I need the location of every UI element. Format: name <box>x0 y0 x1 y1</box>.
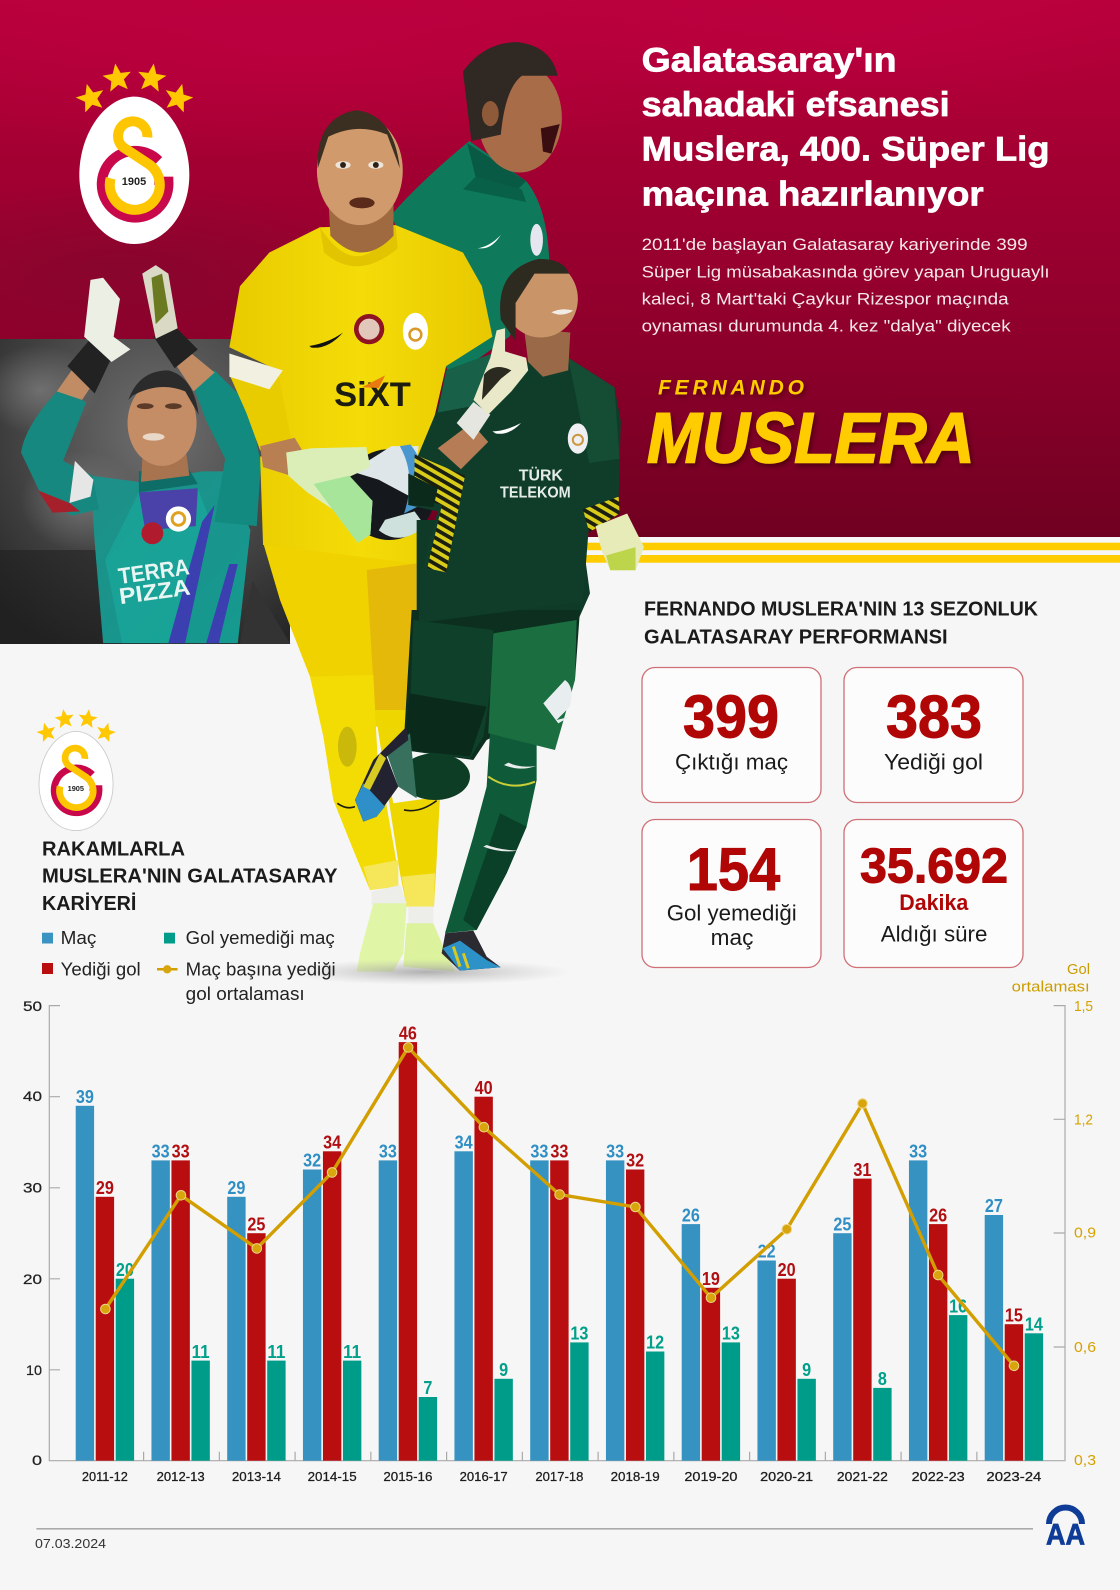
legend: Gol yemediği maç <box>186 927 335 948</box>
season 2012-13: 11 <box>192 1342 210 1362</box>
ball <box>344 449 435 540</box>
right axis labels: 1,5 <box>1074 998 1093 1015</box>
stat card: goals conceded: Yediği gol <box>884 749 983 774</box>
season 2023-24 <box>985 1196 1043 1484</box>
forearm and glove <box>438 423 488 469</box>
legend: Maç <box>61 927 96 948</box>
icon: agency logo <box>1046 1508 1085 1552</box>
icon: agency logo: AA <box>1046 1519 1085 1552</box>
crest and sponsor <box>166 506 191 532</box>
season 2021-22 <box>833 1160 892 1484</box>
stat card: clean sheets: maç <box>711 925 753 950</box>
right axis labels: 0,9 <box>1074 1224 1096 1242</box>
season 2023-24: 2023-24 <box>986 1469 1041 1484</box>
title: Galatasaray'ın <box>642 41 897 79</box>
season 2018-19: 32 <box>626 1151 644 1171</box>
left axis labels: 50 <box>23 998 42 1014</box>
season 2012-13 <box>151 1142 210 1484</box>
season 2022-23: 2022-23 <box>912 1469 965 1484</box>
arms <box>21 389 99 516</box>
stat card: goals conceded: 383 <box>886 683 982 750</box>
left axis labels: 30 <box>23 1180 42 1196</box>
title: maçına hazırlanıyor <box>642 175 984 213</box>
glove <box>286 447 372 543</box>
yellow jersey <box>229 110 492 564</box>
season 2015-16 <box>379 1023 437 1484</box>
club crest large: 1905 <box>122 176 146 188</box>
name: Fernando Muslera: FERNANDO <box>658 377 804 400</box>
name: Fernando Muslera: MUSLERA <box>647 400 975 478</box>
season 2019-20: 19 <box>702 1269 720 1289</box>
stat card: matches <box>642 668 821 802</box>
season 2019-20: 2019-20 <box>684 1469 737 1484</box>
crest, swoosh and sponsor <box>568 423 588 454</box>
title: Muslera, 400. Süper Lig <box>642 131 1050 169</box>
season 2016-17: 40 <box>475 1078 493 1098</box>
season 2012-13: 2012-13 <box>157 1469 205 1484</box>
season 2021-22: 25 <box>833 1214 851 1234</box>
player: goalkeeper in yellow <box>229 110 492 972</box>
intro paragraph: 2011'de başlayan Galatasaray kariyerinde 399 <box>642 235 1028 254</box>
season 2023-24: 14 <box>1025 1314 1043 1334</box>
season 2018-19: 12 <box>646 1333 664 1353</box>
season 2021-22: 31 <box>853 1160 871 1180</box>
season 2014-15: 34 <box>323 1132 341 1152</box>
season 2015-16: 2015-16 <box>383 1469 432 1484</box>
club crest large <box>73 61 196 244</box>
season 2017-18 <box>530 1142 589 1484</box>
season 2015-16: 46 <box>399 1023 417 1043</box>
season 2020-21 <box>757 1242 816 1484</box>
chart heading: RAKAMLARLA <box>42 838 185 861</box>
right axis labels <box>1074 998 1096 1469</box>
season 2020-21: 9 <box>802 1360 811 1380</box>
chart heading: MUSLERA'NIN GALATASARAY <box>42 865 338 888</box>
season 2011-12: 20 <box>116 1260 134 1280</box>
performance heading: FERNANDO MUSLERA'NIN 13 SEZONLUK <box>644 598 1038 621</box>
season 2016-17: 2016-17 <box>460 1469 508 1484</box>
season 2018-19: 33 <box>606 1142 624 1162</box>
season 2013-14: 25 <box>247 1214 265 1234</box>
shadow under players <box>282 959 572 985</box>
axes and ticks <box>49 1006 1065 1461</box>
season 2017-18: 13 <box>570 1324 588 1344</box>
season 2011-12: 2011-12 <box>82 1469 128 1484</box>
intro paragraph: kaleci, 8 Mart'taki Çaykur Rizespor maçında <box>642 289 1009 308</box>
season 2012-13: 33 <box>172 1142 190 1162</box>
teal jersey body <box>90 471 250 643</box>
season 2016-17 <box>454 1078 513 1484</box>
yellow jersey: SiXT <box>334 376 411 414</box>
right axis labels: 0,3 <box>1074 1452 1096 1469</box>
season 2015-16: 33 <box>379 1142 397 1162</box>
right axis title <box>1012 961 1090 996</box>
season 2022-23 <box>909 1142 967 1484</box>
season 2022-23: 16 <box>949 1296 967 1316</box>
left axis labels: 0 <box>32 1452 42 1468</box>
stat card: clean sheets <box>642 820 821 968</box>
legend: Yediği gol <box>61 958 141 979</box>
stat card: matches: Çıktığı maç <box>675 749 788 774</box>
head <box>139 463 198 492</box>
legend <box>42 927 336 1004</box>
left axis labels: 20 <box>23 1271 42 1287</box>
yellow shorts and legs <box>263 543 455 972</box>
season 2017-18: 33 <box>530 1142 548 1162</box>
performance heading: GALATASARAY PERFORMANSI <box>644 625 948 648</box>
head <box>328 198 394 253</box>
player: goalkeeper in dark green, front <box>355 259 644 971</box>
legend: Maç başına yediği <box>186 958 336 979</box>
club crest small <box>35 708 118 831</box>
season 2011-12: 29 <box>96 1178 114 1198</box>
season 2023-24: 27 <box>985 1196 1003 1216</box>
top crimson banner <box>0 0 1120 537</box>
season 2014-15: 32 <box>303 1151 321 1171</box>
season 2022-23: 26 <box>929 1205 947 1225</box>
season 2015-16: 7 <box>423 1378 432 1398</box>
footer line and date: 07.03.2024 <box>35 1536 106 1551</box>
stat card: minutes played: 35.692 <box>860 840 1008 894</box>
green jersey: TELEKOM <box>500 484 571 501</box>
season 2013-14 <box>227 1178 286 1484</box>
season 2017-18: 2017-18 <box>535 1469 583 1484</box>
season 2021-22: 8 <box>878 1369 887 1389</box>
chart heading <box>42 838 338 915</box>
season 2017-18: 33 <box>550 1142 568 1162</box>
season 2019-20: 26 <box>682 1205 700 1225</box>
title <box>642 41 1050 213</box>
season 2020-21: 20 <box>778 1260 796 1280</box>
season 2013-14: 11 <box>267 1342 285 1362</box>
stat card: minutes played <box>844 820 1023 968</box>
left axis labels: 40 <box>23 1088 42 1104</box>
season 2022-23: 33 <box>909 1142 927 1162</box>
player: clapping goalkeeper in teal: TERRA <box>117 553 191 589</box>
stat card: clean sheets: 154 <box>687 836 781 903</box>
right axis labels: 1,2 <box>1074 1112 1093 1129</box>
stat card: goals conceded <box>844 668 1023 802</box>
season 2011-12 <box>76 1087 134 1484</box>
right axis title: ortalaması <box>1012 979 1090 996</box>
player: clapping goalkeeper in teal: PIZZA <box>117 574 192 609</box>
player: screaming goalkeeper in green, back <box>391 42 562 379</box>
stat card: clean sheets: Gol yemediği <box>667 901 797 926</box>
season 2023-24: 15 <box>1005 1305 1023 1325</box>
season 2013-14: 2013-14 <box>232 1469 281 1484</box>
season 2014-15: 2014-15 <box>308 1469 357 1484</box>
grey photo panel <box>0 339 290 644</box>
season 2011-12: 39 <box>76 1087 94 1107</box>
season 2021-22: 2021-22 <box>837 1469 888 1484</box>
green jersey: TÜRK <box>519 466 563 485</box>
left axis labels <box>23 998 42 1468</box>
season 2014-15: 11 <box>343 1342 361 1362</box>
right axis labels: 0,6 <box>1074 1339 1096 1356</box>
intro paragraph <box>642 235 1050 335</box>
player: clapping goalkeeper in teal <box>21 265 290 644</box>
yellow stripes under banner <box>576 543 1120 563</box>
season 2016-17: 9 <box>499 1360 508 1380</box>
green jersey <box>408 259 644 623</box>
stat card: matches: 399 <box>683 683 779 750</box>
season 2019-20: 13 <box>722 1324 740 1344</box>
green shorts and legs <box>355 520 590 971</box>
stat card: minutes played: Aldığı süre <box>881 922 987 947</box>
title: sahadaki efsanesi <box>642 86 950 124</box>
stat card: minutes played: Dakika <box>899 890 969 915</box>
intro paragraph: oynaması durumunda 4. kez "dalya" diyecek <box>642 316 1011 335</box>
club crest small: 1905 <box>68 784 84 793</box>
chart heading: KARİYERİ <box>42 892 136 915</box>
season 2016-17: 34 <box>455 1132 473 1152</box>
average goals line <box>101 1043 1019 1371</box>
season 2020-21: 2020-21 <box>760 1469 813 1484</box>
season 2018-19 <box>606 1142 664 1484</box>
combo chart <box>23 998 1096 1484</box>
legend: gol ortalaması <box>186 983 305 1004</box>
season 2013-14: 29 <box>227 1178 245 1198</box>
left axis labels: 10 <box>26 1362 42 1378</box>
season 2018-19: 2018-19 <box>611 1469 660 1484</box>
head <box>524 328 570 377</box>
performance heading <box>644 598 1038 648</box>
intro paragraph: Süper Lig müsabakasında görev yapan Uruguaylı <box>642 262 1050 282</box>
season 2012-13: 33 <box>152 1142 170 1162</box>
season 2019-20 <box>682 1205 740 1484</box>
season 2014-15 <box>303 1132 361 1484</box>
right axis title: Gol <box>1067 961 1090 978</box>
season 2020-21: 22 <box>758 1242 776 1262</box>
